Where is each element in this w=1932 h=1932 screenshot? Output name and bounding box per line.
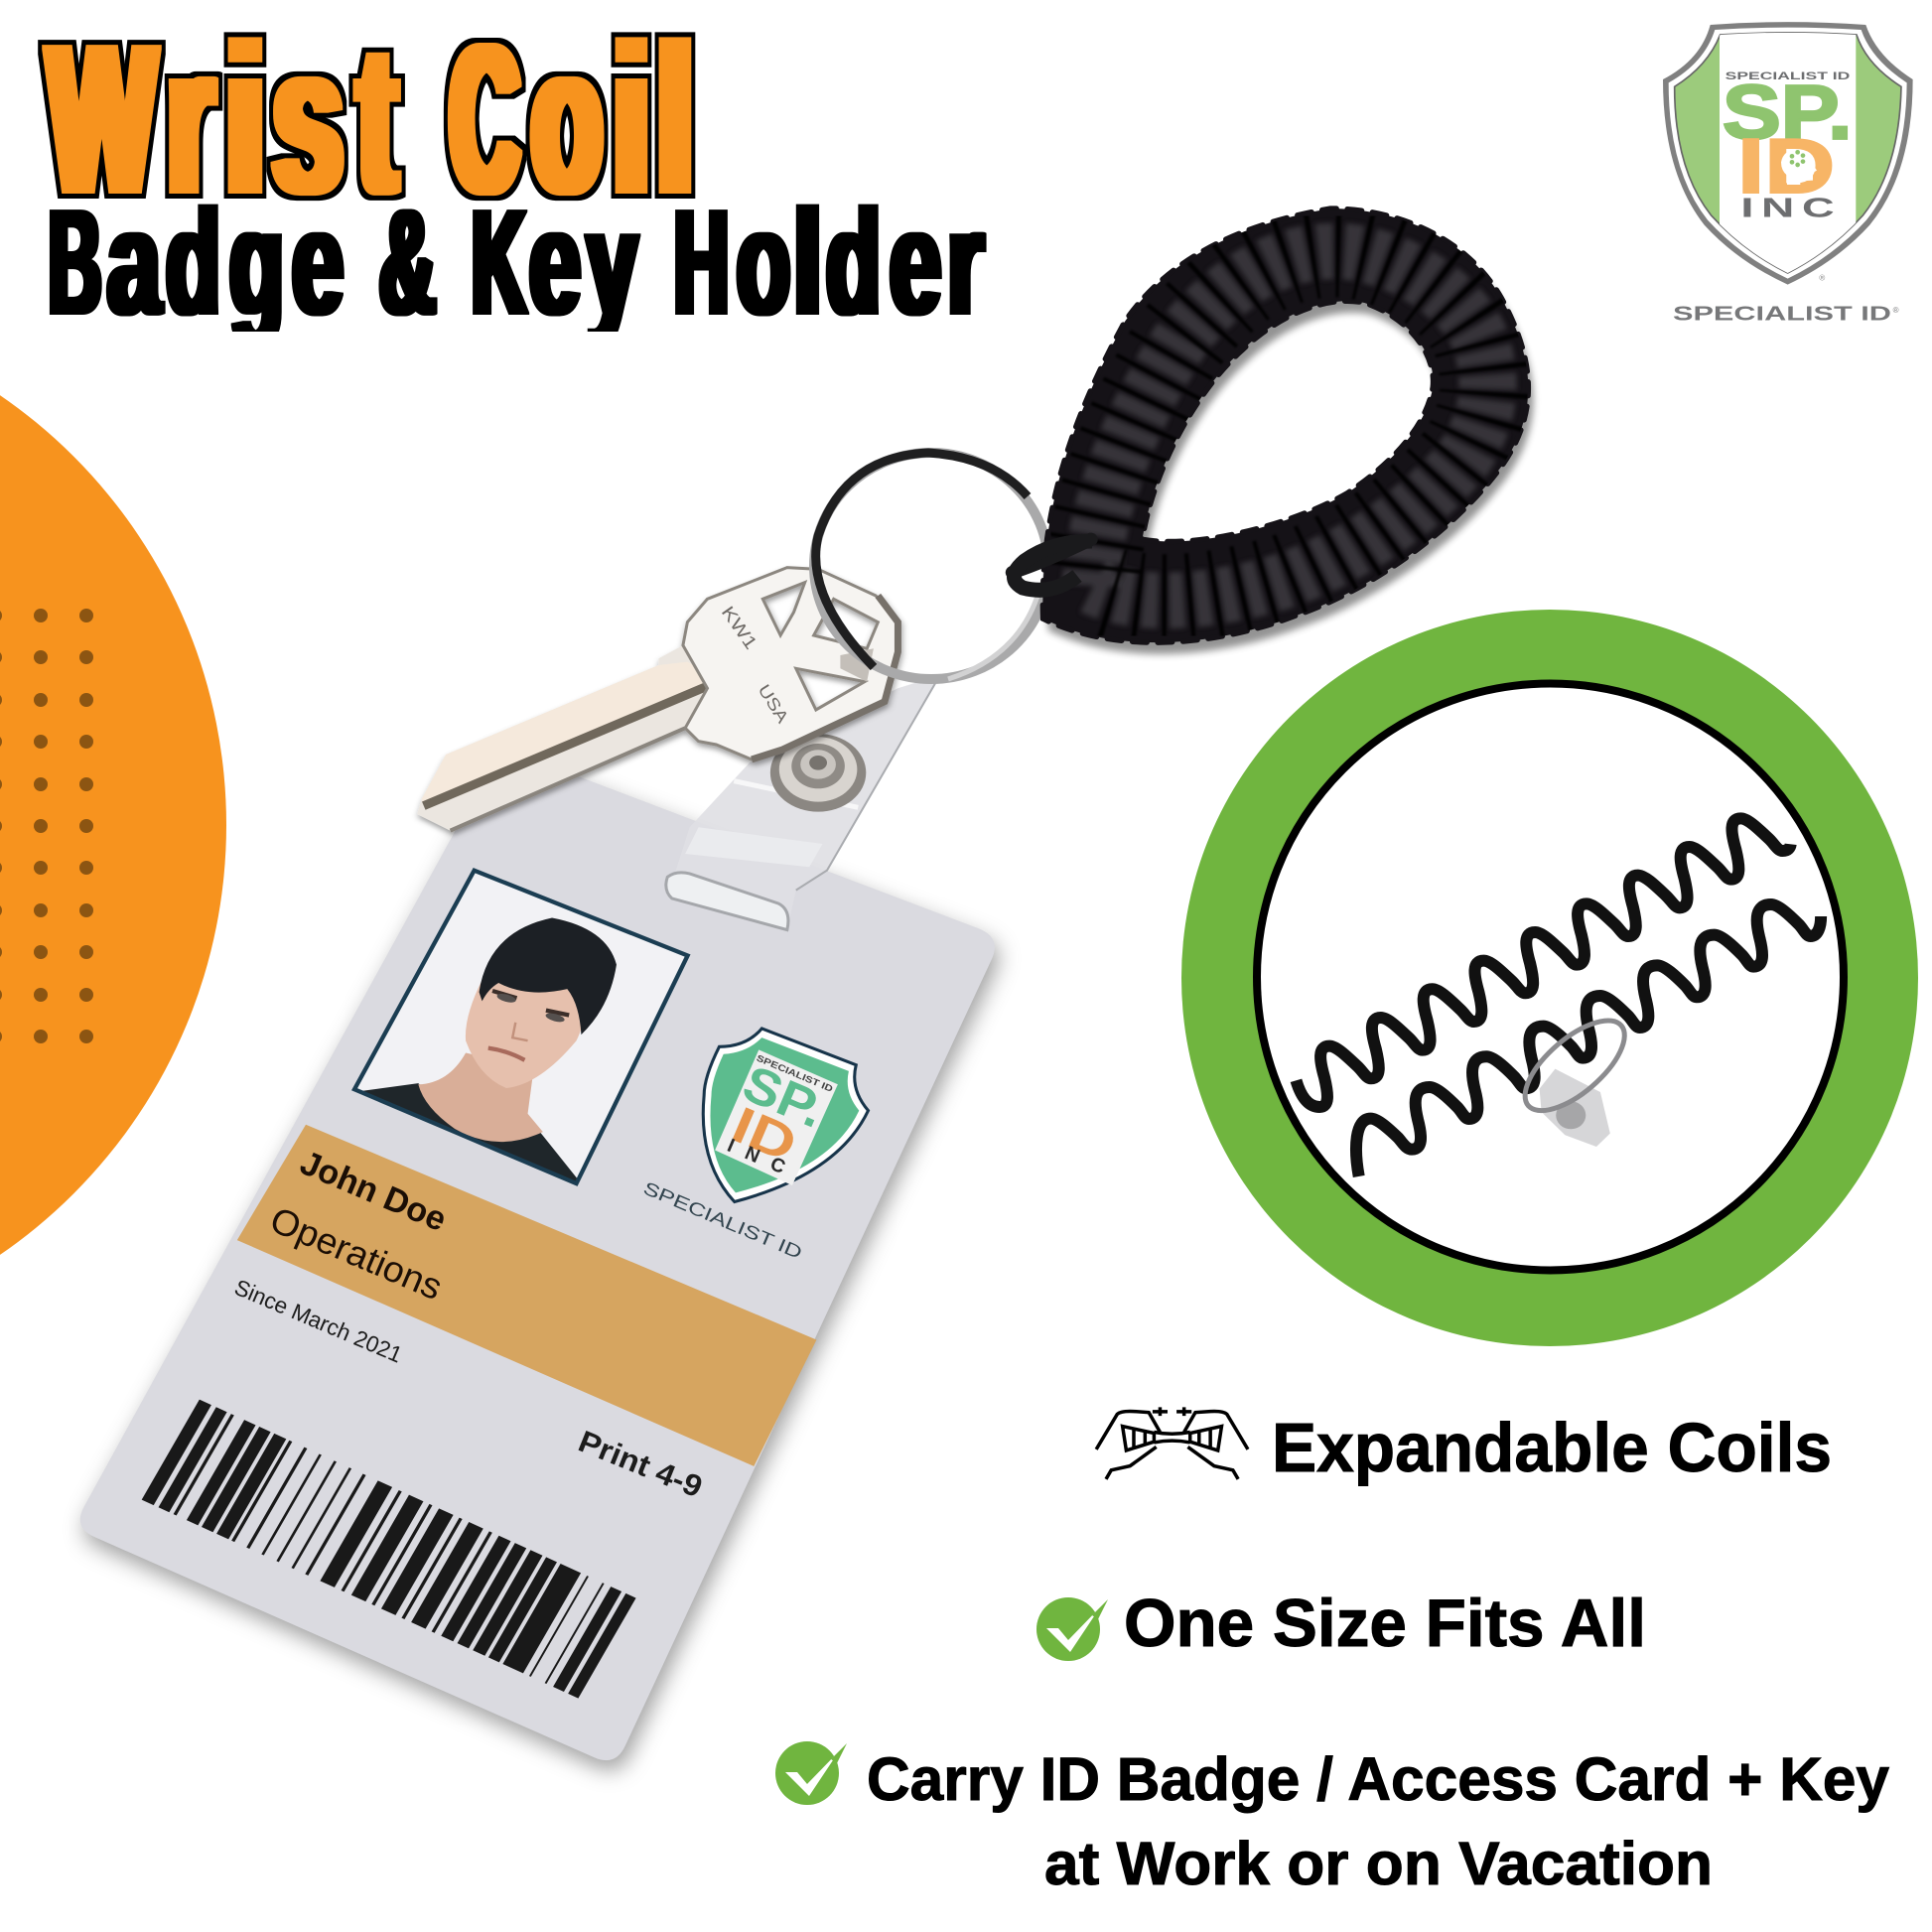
logo: Specialist ID shield: N [1761, 192, 1794, 222]
subtitle: Badge & Key Holder: a [107, 178, 162, 345]
print code text: Print 4-9 [574, 1425, 707, 1504]
title: Wrist Coil: W [49, 1, 155, 236]
card shadow [84, 765, 999, 1770]
subtitle: Badge & Key Holder: & [379, 178, 436, 345]
subtitle: Badge & Key Holder: g [229, 178, 284, 345]
orange name band [237, 1125, 816, 1466]
subtitle: Badge & Key Holder: e [292, 178, 344, 345]
subtitle: Badge & Key Holder: y [587, 178, 637, 345]
ID badge card [80, 753, 999, 1770]
key stamp: KW1: KW1 [718, 603, 761, 653]
logo: Specialist ID shield: ID [1737, 122, 1835, 209]
small card logo: INC [724, 1135, 788, 1178]
barcode [142, 1400, 636, 1699]
title: Wrist Coil: C [451, 1, 518, 236]
decorative orange semicircle with dots [0, 304, 226, 1346]
icon: hands stretching coil [1096, 1407, 1248, 1479]
coil ribs [1091, 251, 1488, 601]
logo: Specialist ID shield [1663, 22, 1913, 325]
coil end loop [1013, 539, 1091, 573]
since date text: Since March 2021 [231, 1274, 406, 1368]
icon: green check 1 [1036, 1597, 1108, 1661]
title: Wrist Coil: t [358, 1, 396, 236]
split ring [814, 453, 1048, 679]
title: Wrist Coil: r [168, 1, 213, 236]
logo: Specialist ID shield: SP. [1723, 69, 1853, 155]
portrait photo [351, 871, 688, 1192]
key head [683, 568, 897, 759]
logo: Specialist ID shield: SPECIALIST ID [1673, 303, 1891, 325]
small card logo [640, 1029, 868, 1263]
subtitle: Badge & Key Holder: d [166, 178, 220, 345]
title: Wrist Coil: i [224, 1, 266, 236]
subtitle: Badge & Key Holder: e [890, 178, 941, 345]
clear vinyl strap [666, 675, 940, 930]
subtitle: Badge & Key Holder: K [472, 178, 526, 345]
logo: Specialist ID shield: SPECIALIST ID [1725, 70, 1850, 82]
subtitle: Badge & Key Holder: e [529, 178, 581, 345]
subtitle: Badge & Key Holder: r [947, 178, 984, 345]
small card logo: SPECIALIST ID [640, 1177, 805, 1263]
small ring and clip on spring [1508, 1007, 1641, 1147]
coil connector loop [1014, 541, 1092, 590]
subtitle: Badge & Key Holder: o [737, 178, 790, 345]
title: Wrist Coil: i [613, 1, 650, 236]
logo: Specialist ID shield: I [1740, 192, 1754, 222]
subtitle: Badge & Key Holder: d [826, 178, 881, 345]
icon: green check 2 [775, 1741, 847, 1805]
card contents [142, 871, 868, 1699]
department text: Operations [264, 1199, 448, 1308]
small card logo: ID [724, 1095, 805, 1173]
feature text: Carry ID Badge line: Carry ID Badge / Access Card + Key [867, 1745, 1889, 1813]
subtitle: Badge & Key Holder: l [792, 178, 823, 345]
logo: Specialist ID shield: ® [1819, 274, 1825, 283]
title: Wrist Coil: s [273, 1, 343, 236]
feature text: One Size Fits All: One Size Fits All [1124, 1586, 1646, 1661]
small card logo: SPECIALIST ID [755, 1052, 835, 1094]
key [417, 568, 897, 831]
title: Wrist Coil: l [656, 1, 694, 236]
feature text: Expandable Coils: Expandable Coils [1272, 1409, 1832, 1486]
key stamp: USA: USA [755, 681, 792, 727]
expanded spring coils [1296, 818, 1821, 1176]
key, strap and ring hardware [417, 568, 940, 930]
title: Wrist Coil: o [532, 1, 602, 236]
card body [80, 753, 995, 1760]
small card logo: SP. [735, 1053, 833, 1139]
name text: John Doe [295, 1144, 452, 1239]
subtitle: Badge & Key Holder: B [49, 178, 101, 345]
metal snap [770, 734, 866, 812]
logo: Specialist ID shield: C [1802, 192, 1835, 222]
feature text: at Work line: at Work or on Vacation [1044, 1830, 1713, 1897]
subtitle: Badge & Key Holder: H [674, 178, 729, 345]
black wrist coil [1013, 208, 1533, 654]
green circle with coil detail [1181, 610, 1918, 1346]
key blade [417, 645, 707, 831]
logo: Specialist ID shield: ® [1893, 306, 1899, 315]
